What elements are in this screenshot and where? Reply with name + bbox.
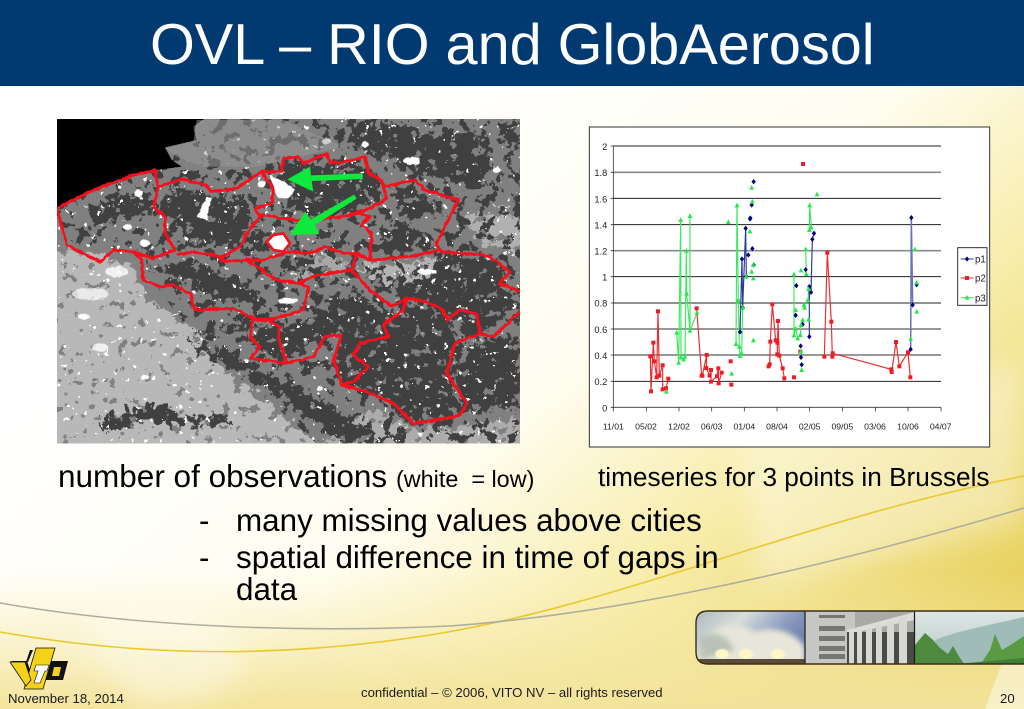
footer confidentiality notice: confidential – © 2006, VITO NV – all rights reserved [361, 685, 663, 700]
series p3 lines [677, 205, 811, 363]
chart frame [589, 127, 990, 447]
title: OVL – RIO and GlobAerosol [150, 13, 875, 77]
chart legend: p3 [975, 293, 986, 304]
x axis labels: 10/06 [897, 421, 919, 431]
y axis labels: 0.8 [594, 299, 607, 309]
y axis labels: 1 [602, 273, 607, 283]
x axis labels: 05/02 [635, 421, 657, 431]
y axis labels: 1.6 [594, 194, 607, 204]
photo: building with columns [805, 610, 915, 665]
y axis labels: 0.4 [594, 351, 607, 361]
series p2 lines [650, 253, 910, 391]
x axis labels: 06/03 [701, 421, 723, 431]
light southern plain [50, 210, 530, 453]
x axis labels: 04/07 [930, 421, 952, 431]
x axis labels [603, 421, 952, 431]
y axis labels: 2 [602, 142, 607, 152]
arrow: lower green arrow [290, 195, 357, 235]
bullet: spatial difference [199, 540, 719, 607]
y axis labels: 1.8 [594, 168, 607, 178]
x axis labels: 02/05 [799, 421, 821, 431]
bullet: missing values: - [199, 503, 209, 538]
series p3 markers [664, 185, 919, 394]
photo: forest landscape [915, 610, 1024, 665]
x axis labels: 03/06 [864, 421, 886, 431]
x axis labels: 08/04 [766, 421, 788, 431]
series p1 lines [740, 218, 913, 349]
chart legend: p2 [975, 274, 986, 285]
y axis labels [594, 142, 607, 413]
series p2 markers [648, 162, 912, 393]
y axis labels: 1.2 [594, 246, 607, 256]
text: many missing values above cities [236, 503, 702, 538]
photo: smoke stacks [695, 610, 805, 665]
dark forest and polder patches [90, 120, 518, 443]
y axis labels: 0.6 [594, 325, 607, 335]
x axis labels: 01/04 [733, 421, 755, 431]
photo dividers [805, 610, 914, 665]
chart legend: p1 [975, 255, 986, 266]
photo strip [695, 610, 1024, 665]
bullet: spatial difference: spatial difference in time of gaps in [236, 540, 719, 575]
red province boundaries [57, 153, 520, 423]
axes [611, 146, 941, 411]
map caption: number of observations (white = low) [58, 458, 534, 494]
base grey land [57, 119, 520, 443]
header band [0, 0, 1024, 86]
black sea and estuary [57, 119, 204, 208]
y axis labels: 0.2 [594, 377, 607, 387]
chart legend [958, 248, 987, 305]
bullet: spatial difference: data [236, 572, 297, 607]
bullet: spatial difference: - [199, 540, 209, 575]
page number: 20 [1000, 691, 1015, 706]
Brussels region outline [267, 233, 290, 252]
gridlines [613, 146, 941, 381]
y axis labels: 1.4 [594, 220, 607, 230]
white low-observation spots [72, 138, 501, 391]
x axis labels: 11/01 [603, 421, 624, 431]
footer date: November 18, 2014 [8, 691, 124, 706]
map: number of observations [57, 119, 520, 444]
x axis labels: 12/02 [668, 421, 690, 431]
series p1 markers [738, 179, 919, 367]
y axis labels: 0 [602, 403, 607, 413]
bullet: missing values [199, 503, 702, 538]
x axis labels: 09/05 [831, 421, 853, 431]
arrow: upper green arrow [287, 167, 363, 192]
chart caption: timeseries for 3 points in Brussels [598, 462, 990, 492]
